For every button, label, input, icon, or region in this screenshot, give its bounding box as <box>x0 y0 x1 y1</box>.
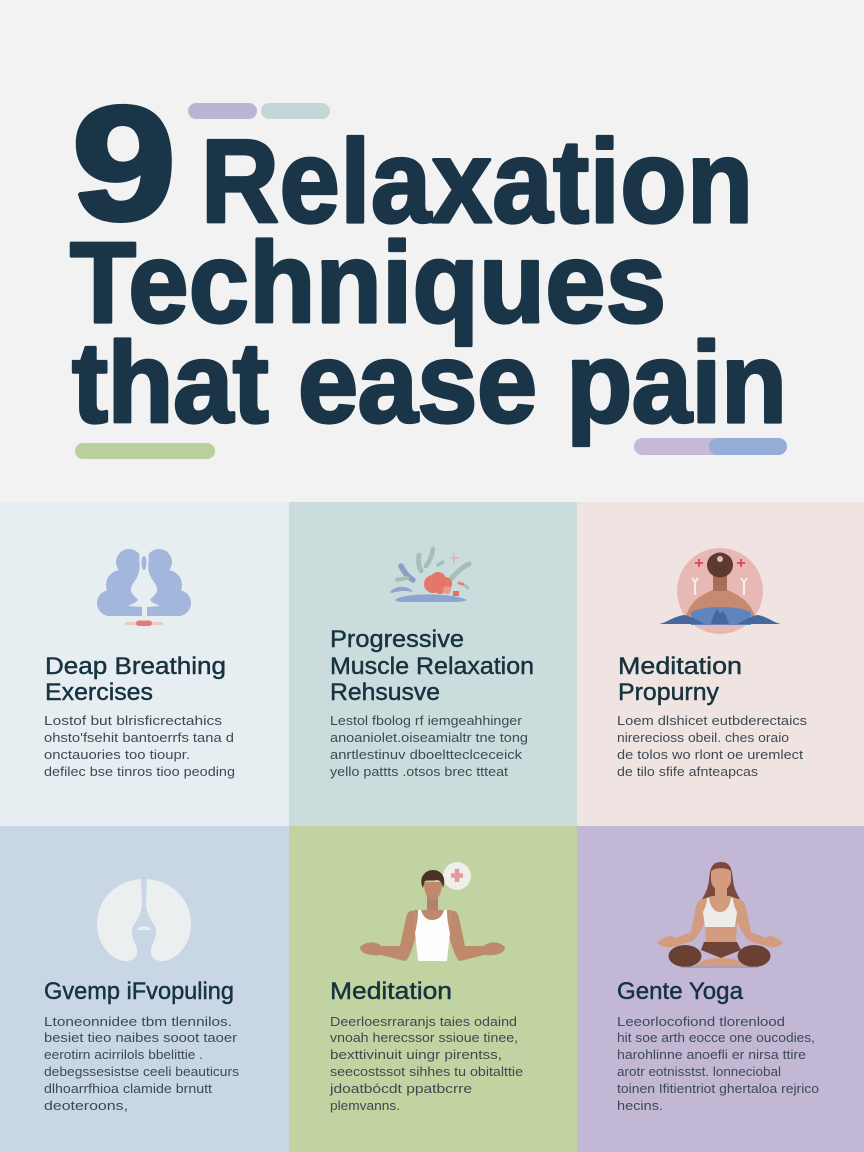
body text: debegssesistse ceeli beauticurs <box>44 1064 240 1079</box>
body text: hit soe arth eocce one oucodies, <box>617 1030 815 1045</box>
heading: Gente Yoga <box>617 978 744 1005</box>
title: 9 <box>72 74 176 254</box>
body text: vnoah herecssor ssioue tinee, <box>330 1030 518 1045</box>
panel: progressive muscle relaxation <box>289 502 577 826</box>
body text <box>617 713 808 779</box>
body text: arotr eotnisstst. lonneciobal <box>617 1064 781 1079</box>
icon: meditating person <box>360 862 505 961</box>
panel: gvemp ifvopuling <box>0 826 289 1152</box>
body text: Leeorlocofiond tlorenlood <box>617 1014 785 1029</box>
panel: deep breathing exercises <box>0 502 289 826</box>
panel: meditation <box>289 826 577 1152</box>
heading: Propurny <box>618 679 719 706</box>
body text: plemvanns. <box>330 1098 400 1113</box>
body text: Lostof but blrisficrectahics <box>44 713 223 728</box>
body text <box>329 1014 523 1113</box>
body text <box>617 1014 819 1113</box>
panel: gentle yoga <box>577 826 864 1152</box>
body text: yello pattts .otsos brec ttteat <box>330 764 508 779</box>
heading: Muscle Relaxation <box>330 653 534 680</box>
accent pill green <box>75 443 215 459</box>
body text <box>44 713 235 779</box>
body text: seecostssot sihhes tu obitalttie <box>330 1064 523 1079</box>
title: Techniques <box>70 218 666 347</box>
heading: Meditation <box>330 978 452 1005</box>
heading: Meditation <box>618 653 742 680</box>
heading: Deap Breathing <box>45 653 226 680</box>
body text <box>44 1014 240 1113</box>
body text: Lestol fbolog rf iemgeahhinger <box>330 713 523 728</box>
icon: lungs <box>97 879 191 961</box>
icon: yoga pose <box>657 862 783 967</box>
body text: anoaniolet.oiseamialtr tne tong <box>330 730 528 745</box>
body text: Loem dlshicet eutbderectaics <box>617 713 808 728</box>
title: Relaxation <box>201 116 753 247</box>
body text: besiet tieo naibes sooot taoer <box>44 1030 238 1045</box>
icon: seated figure from behind <box>659 548 781 634</box>
heading: Gvemp iFvopuling <box>44 978 234 1005</box>
body text <box>330 713 528 779</box>
heading: Progressive <box>330 626 464 653</box>
icon: breathing tree <box>97 547 191 626</box>
heading: Exercises <box>45 679 153 706</box>
body text: nirerecioss obeil. ches oraio <box>617 730 789 745</box>
body text: de tilo sfife afnteapcas <box>617 764 759 779</box>
body text: dlhoarrfhioa clamide brnutt <box>44 1081 212 1096</box>
body text: de tolos wo rlont oe uremlect <box>617 747 803 762</box>
icon: muscle burst <box>390 549 469 602</box>
heading <box>45 653 226 706</box>
heading <box>330 626 534 706</box>
body text: defilec bse tinros tioo peoding <box>44 764 235 779</box>
body text: anrtlestinuv dboeltteclceceick <box>330 747 523 762</box>
body text: eerotirn acirrilols bbelittie . <box>44 1047 203 1062</box>
accent pills top <box>188 103 330 119</box>
body text: ohsto'fsehit bantoerrfs tana d <box>44 730 234 745</box>
body text: onctauories too tioupr. <box>44 747 190 762</box>
body text: toinen Ifitientriot ghertaloa rejrico <box>617 1081 819 1096</box>
title: that ease pain <box>72 318 787 447</box>
body text: Ltoneonnidee tbm tlennilos. <box>44 1014 232 1029</box>
body text: bexttivinuit uingr pirentss, <box>330 1047 502 1062</box>
heading <box>618 653 742 706</box>
panel: meditation propurny <box>577 502 864 826</box>
body text: jdoatbócdt ppatbcrre <box>329 1081 472 1096</box>
body text: deoteroons, <box>44 1098 128 1113</box>
accent pills right <box>634 438 787 455</box>
body text: harohlinne anoefli er nirsa ttire <box>617 1047 806 1062</box>
body text: hecins. <box>617 1098 663 1113</box>
heading: Rehsusve <box>330 679 440 706</box>
title <box>70 74 787 447</box>
body text: Deerloesrraranjs taies odaind <box>330 1014 517 1029</box>
